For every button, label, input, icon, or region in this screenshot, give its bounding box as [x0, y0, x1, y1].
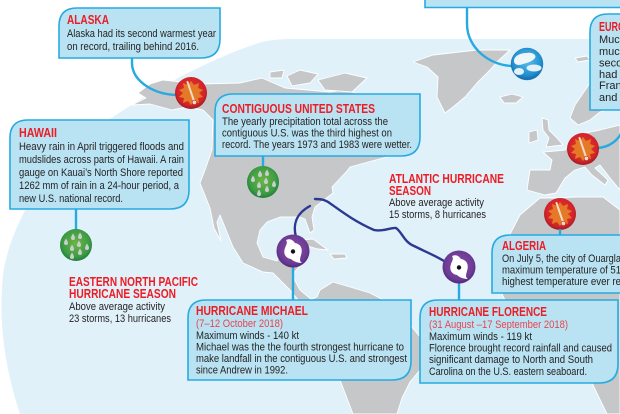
- map: land masses: [132, 50, 620, 414]
- text: contiguous United States body: contiguous U.S. was the third highest on: [222, 128, 392, 140]
- text: Florence body: Carolina on the U.S. eastern seaboard.: [429, 366, 587, 378]
- heading: Atlantic hurricane season: ATLANTIC HURRICANE: [389, 172, 504, 186]
- text block: Eastern North Pacific hurricane season: [69, 275, 198, 325]
- land: North America: [132, 78, 400, 302]
- text: Florence dates: (31 August –17 September 2018): [429, 319, 568, 331]
- panel: Hurricane Florence: [420, 300, 618, 383]
- land: Scandinavia: [570, 80, 620, 125]
- text: Eastern Pacific season body: Above average activity: [69, 301, 165, 313]
- connector: Alaska: [132, 58, 178, 95]
- land: Europe: [527, 125, 620, 195]
- text: Alaska body: Alaska had its second warmest year: [67, 28, 216, 40]
- panel: Hawaii: [10, 120, 189, 209]
- connector: Florence: [458, 283, 460, 301]
- connector: Algeria: [559, 229, 561, 236]
- icon: Florence hurricane: [442, 250, 476, 284]
- land: Africa: [495, 197, 620, 414]
- text: Michael body: Michael was the the fourth strongest hurricane to: [196, 342, 404, 354]
- arrow: Florence track: [315, 199, 444, 261]
- heading: Atlantic hurricane season: SEASON: [389, 184, 431, 198]
- text: Eastern Pacific season body: 23 storms, 13 hurricanes: [69, 313, 171, 325]
- connector: Hawaii: [75, 208, 77, 232]
- connector: top callout to cloud icon: [467, 8, 513, 66]
- text: Hawaii body: new U.S. national record.: [19, 193, 123, 205]
- text: Alaska body: on record, trailing behind 2016.: [67, 41, 199, 53]
- text: Michael body: since Andrew in 1992.: [196, 364, 288, 376]
- land: Asia fragment: [575, 56, 590, 62]
- icon: cloud: [511, 48, 543, 80]
- connector: contiguous US: [262, 156, 264, 168]
- icon: Michael hurricane: [276, 234, 310, 268]
- land: South America: [300, 282, 420, 414]
- text: Michael body: make landfall in the contiguous U.S. and strongest: [196, 353, 407, 365]
- land: Cuba and Caribbean: [300, 239, 347, 259]
- text: Atlantic season body: Above average activity: [389, 197, 484, 209]
- heading: Hawaii: HAWAII: [19, 126, 57, 140]
- icon: contiguous US rain: [247, 166, 279, 198]
- icon: Algeria thermometer: [544, 198, 576, 230]
- panel: Algeria: [492, 235, 620, 293]
- text: Hawaii body: Heavy rain in April triggered floods and: [19, 141, 184, 153]
- panel: Alaska: [59, 8, 220, 58]
- land: Arctic islands: [270, 70, 367, 92]
- icon: Europe thermometer: [567, 133, 599, 165]
- text: Atlantic season body: 15 storms, 8 hurricanes: [389, 209, 486, 221]
- heading: Alaska: ALASKA: [67, 13, 109, 27]
- text: Florence body: Maximum winds - 119 kt: [429, 331, 532, 343]
- connector: Europe: [598, 132, 620, 148]
- panel: top clipped callout: [425, 0, 620, 8]
- heading: Hurricane Florence: HURRICANE FLORENCE: [429, 305, 547, 319]
- land: Great Britain: [542, 118, 563, 147]
- panel: Europe: [590, 14, 620, 110]
- heading: contiguous United States: CONTIGUOUS UNITED STATES: [222, 102, 375, 116]
- arrow: Michael track: [295, 206, 310, 237]
- icon: Alaska thermometer: [175, 77, 207, 109]
- heading: Eastern North Pacific hurricane season: HURRICANE SEASON: [69, 287, 176, 301]
- land: Iceland: [500, 94, 523, 103]
- text: Hawaii body: 1262 mm of rain in a 24-hour period, a: [19, 180, 180, 192]
- connector: Michael: [292, 266, 294, 301]
- land: Ireland: [529, 130, 538, 143]
- heading: Hurricane Michael: HURRICANE MICHAEL: [196, 304, 308, 318]
- text: Hawaii body: mudslides across parts of Hawaii. A rain: [19, 154, 184, 166]
- text: Florence body: significant damage to North and South: [429, 354, 593, 366]
- text: Hawaii body: gauge on Kauai’s North Shore reported: [19, 167, 183, 179]
- panel: contiguous United States: [215, 94, 420, 156]
- text: Michael body: Maximum winds - 140 kt: [196, 330, 299, 342]
- panel: Hurricane Michael: [188, 300, 411, 380]
- text block: Atlantic hurricane season: [389, 172, 504, 221]
- text: contiguous United States body: The yearly precipitation total across the: [222, 116, 388, 128]
- heading: Eastern North Pacific hurricane season: EASTERN NORTH PACIFIC: [69, 275, 198, 289]
- heading: Algeria: ALGERIA: [502, 239, 546, 253]
- text: Michael dates: (7–12 October 2018): [196, 318, 283, 330]
- land: Greenland: [413, 50, 510, 113]
- icon: Hawaii rain: [60, 229, 92, 261]
- text: contiguous United States body: record. The years 1973 and 1983 were wetter.: [222, 139, 412, 151]
